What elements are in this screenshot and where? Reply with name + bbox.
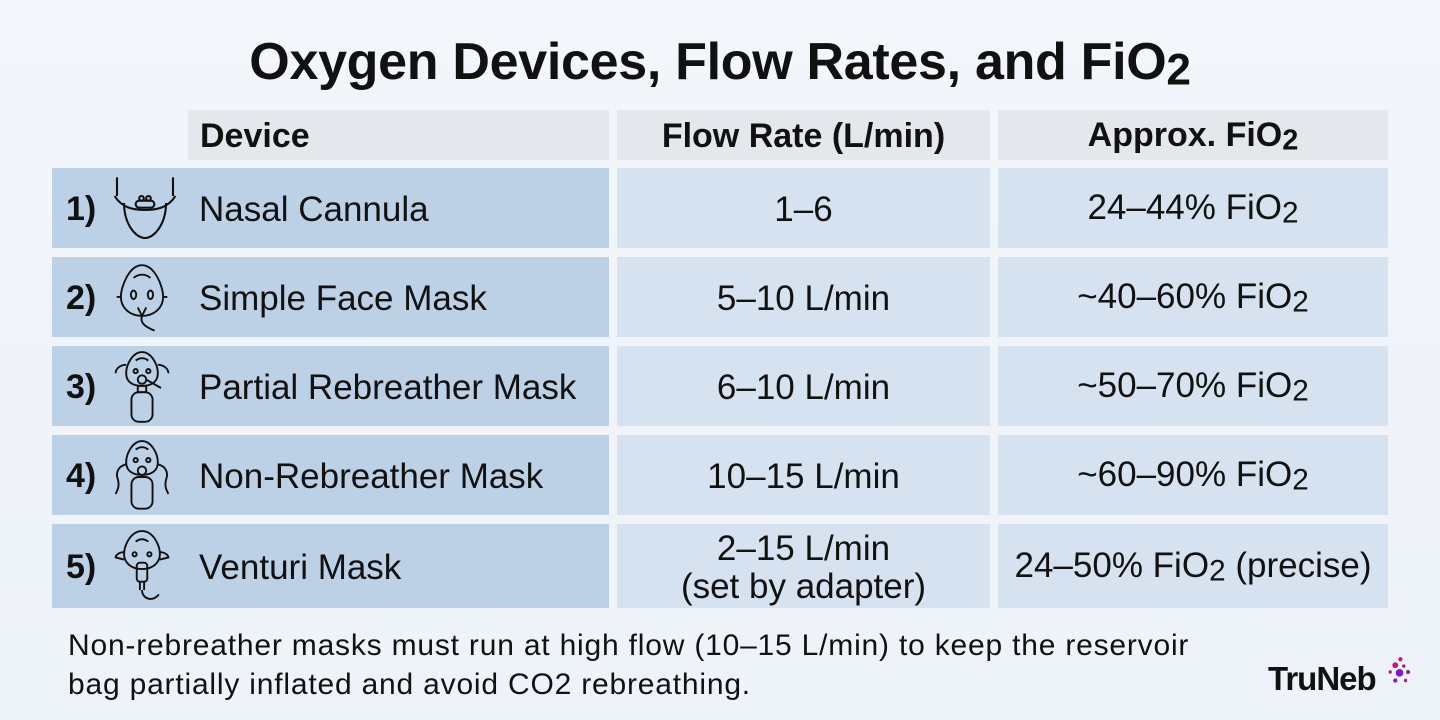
header: FiO2 [998, 110, 1388, 160]
row 5: venturi [52, 524, 609, 608]
footnote [68, 629, 1189, 701]
table: 10–15 L/min [707, 457, 900, 496]
table: ~50–70% FiO2 [1077, 366, 1309, 408]
table: 2–15 L/min [717, 529, 890, 568]
table: 1–6 [774, 190, 833, 229]
footnote: Non-rebreather masks must run at high flow (10–15 L/min) to keep the reservoir [68, 629, 1189, 662]
row 4: non-rebreather: Non-Rebreather Mask [199, 457, 543, 496]
header: device: Device [200, 117, 310, 155]
table: 5–10 L/min [717, 279, 890, 318]
footnote: bag partially inflated and avoid CO2 rebreathing. [68, 668, 751, 701]
table: 24–50% FiO2 (precise) [1014, 546, 1371, 588]
table: ~60–90% FiO2 [1077, 455, 1309, 497]
logo: TruNeb: TruNeb [1268, 660, 1376, 697]
row 3: partial rebreather [52, 346, 609, 426]
table: 24–44% FiO2 [1087, 188, 1299, 230]
header: FiO2: Approx. FiO2 [1088, 116, 1298, 156]
header: flow rate: Flow Rate (L/min) [662, 117, 945, 155]
row 2: simple face mask: 2) [66, 279, 96, 317]
row 5: venturi: Venturi Mask [199, 548, 401, 587]
row 3: partial rebreather: Partial Rebreather Mask [199, 368, 576, 407]
table: (set by adapter) [681, 566, 926, 606]
icon: non-rebreather mask [114, 440, 170, 510]
icon: partial rebreather mask [114, 351, 170, 423]
logo: TruNeb [1268, 657, 1410, 697]
row 5: venturi: 5) [66, 548, 96, 586]
icon: nasal cannula [114, 177, 176, 239]
table: ~40–60% FiO2 [1077, 277, 1309, 319]
table [52, 110, 1388, 608]
table: 6–10 L/min [717, 368, 890, 407]
header: device [188, 110, 609, 160]
row 1: nasal cannula: Nasal Cannula [199, 190, 429, 229]
row 2: simple face mask: Simple Face Mask [199, 279, 487, 318]
row 1: nasal cannula [52, 168, 609, 248]
row 4: non-rebreather: 4) [66, 457, 96, 495]
icon: venturi mask [114, 530, 170, 600]
row 4: non-rebreather [52, 435, 609, 515]
header: flow rate [617, 110, 990, 160]
icon: simple face mask [116, 264, 168, 332]
row 2: simple face mask [52, 257, 609, 337]
title: Oxygen Devices, Flow Rates, and FiO2 [249, 33, 1191, 94]
row 1: nasal cannula: 1) [66, 190, 96, 228]
row 3: partial rebreather: 3) [66, 368, 96, 406]
